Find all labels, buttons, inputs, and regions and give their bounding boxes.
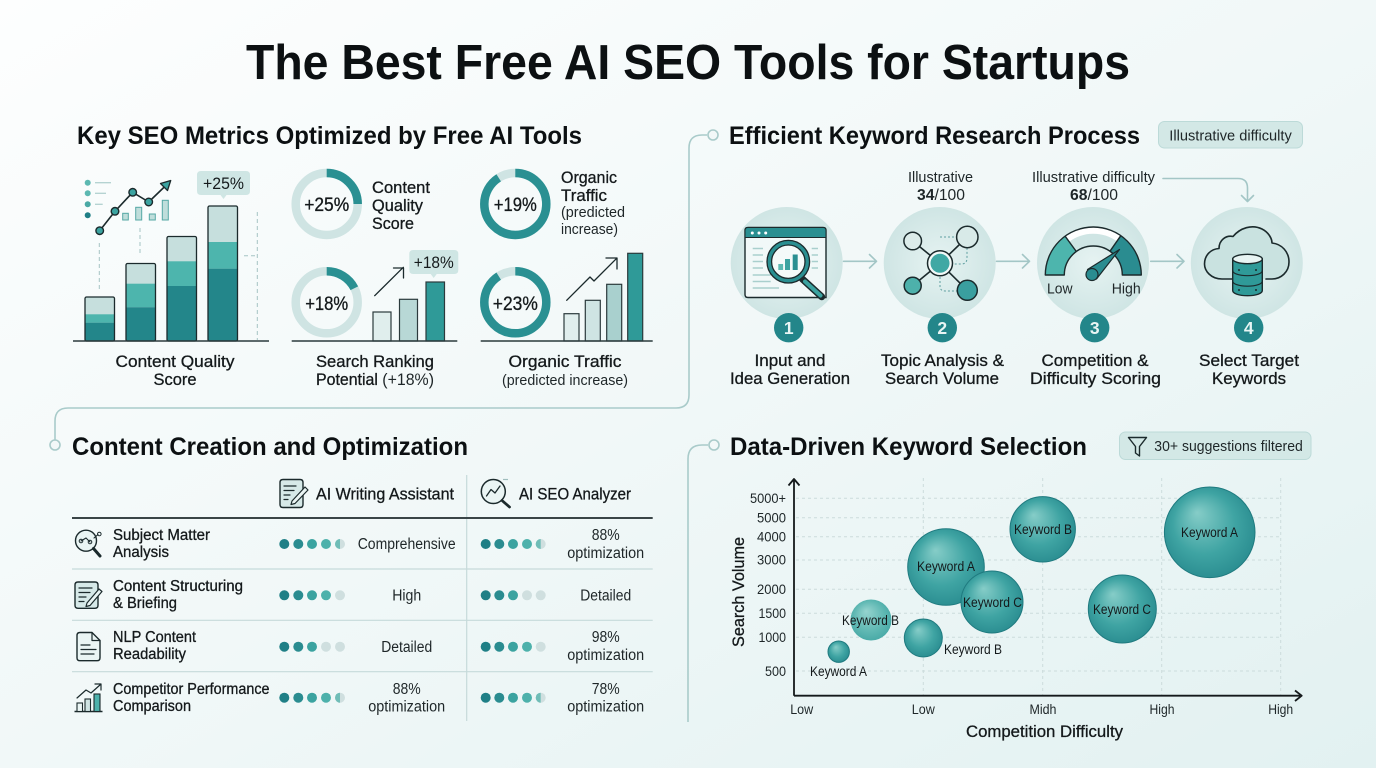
row: content structuring and briefing: & Briefing [113, 595, 177, 612]
donut: +23% organic traffic: +23% [493, 294, 538, 315]
label: organic traffic donut: increase) [561, 221, 618, 238]
badge: number 4: 4 [1244, 318, 1254, 338]
badge: illustrative difficulty: Illustrative difficulty [1169, 128, 1292, 144]
icon: document with pen [75, 582, 102, 608]
axis title: search volume: Search Volume [729, 537, 748, 647]
label: search ranking potential [316, 352, 434, 389]
callout: +18% [409, 250, 458, 278]
heading: data-driven keyword selection: Data-Driven Keyword Selection [730, 433, 1087, 461]
donut: +25% content quality [296, 173, 358, 235]
rating: writing assistant 4.5 of 5 [279, 693, 345, 703]
row: competitor performance comparison [74, 681, 644, 716]
label: organic traffic donut: Organic [561, 168, 617, 187]
label: topic analysis and search volume: Topic Analysis & [881, 351, 1005, 370]
label: topic analysis and search volume [881, 351, 1005, 388]
y-axis tick labels [750, 490, 786, 679]
row: competitor performance comparison: Competitor Performance [113, 681, 270, 698]
bubble labels: Keyword C [1093, 602, 1151, 617]
label: content quality score: Score [154, 370, 196, 389]
y-axis tick labels: 4000 [757, 528, 786, 544]
bubbles [828, 487, 1255, 662]
row: subject matter analysis: Subject Matter [113, 527, 210, 544]
y-axis tick labels: 5000 [757, 510, 786, 526]
panel: keyword research process [729, 122, 1303, 388]
icon: writing document [280, 480, 308, 508]
connector node: keyword research [708, 130, 718, 140]
annotation: illustrative difficulty 68/100: 68/100 [1070, 187, 1118, 204]
label: input and idea generation: Input and [754, 351, 826, 370]
label: organic traffic donut: (predicted [561, 204, 625, 221]
value: comprehensive: Comprehensive [358, 536, 456, 553]
annotation: illustrative difficulty 68/100 [1032, 169, 1155, 204]
step 2: topic analysis and search volume [881, 169, 1005, 388]
step 1: input and idea generation [730, 207, 850, 388]
annotation: illustrative 34/100: 34/100 [917, 187, 965, 204]
y-axis tick labels: 3000 [757, 552, 786, 568]
bubble labels: Keyword A [917, 559, 975, 574]
rating: analyzer 4.5 of 5 [481, 693, 546, 703]
donut: +18% search ranking: +18% [305, 294, 348, 315]
axis title: competition difficulty: Competition Difficulty [966, 722, 1123, 741]
step 4: select target keywords [1191, 207, 1303, 388]
value: 78% optimization [567, 681, 644, 716]
badge: number 1 [774, 313, 803, 342]
callout: +25% [197, 171, 250, 199]
value: high: High [392, 588, 421, 604]
icon: analyzer magnifier [481, 480, 510, 507]
bubble labels: Keyword A [810, 664, 867, 679]
label: search ranking potential: Search Ranking [316, 352, 434, 371]
value: 88% optimization [567, 527, 644, 562]
value: 98% optimization [567, 629, 644, 664]
bubble labels [810, 522, 1238, 679]
arrow: step 2 to 3 [996, 254, 1030, 268]
badge: number 3: 3 [1090, 318, 1100, 338]
row: NLP content readability: Readability [113, 646, 186, 663]
title: The Best Free AI SEO Tools for Startups [246, 36, 1130, 90]
label: organic traffic predicted increase [502, 352, 628, 389]
y-axis tick labels: 2000 [757, 581, 786, 597]
rating: analyzer 4.5 of 5 [481, 539, 546, 549]
x-axis tick labels: Midh [1030, 701, 1056, 717]
column header: AI SEO analyzer: AI SEO Analyzer [519, 484, 631, 504]
column header: AI writing assistant [280, 480, 454, 508]
panel: content creation and optimization [72, 433, 653, 721]
badge: number 3 [1080, 313, 1109, 342]
rating: writing assistant 3 of 5 [279, 642, 345, 652]
x-axis tick labels [790, 701, 1293, 717]
donut: +25% content quality: +25% [304, 195, 349, 216]
bubble labels: Keyword C [963, 595, 1022, 610]
heading: key SEO metrics: Key SEO Metrics Optimized by Free AI Tools [77, 122, 582, 150]
value: 88% optimization: optimization [567, 545, 644, 562]
annotation: illustrative 34/100 [908, 169, 973, 204]
column header: AI writing assistant: AI Writing Assistant [316, 484, 454, 504]
connector: metrics to content [55, 135, 707, 440]
stacked bar chart: content quality score [73, 206, 269, 341]
donut: +19% organic traffic [484, 173, 546, 235]
label: content quality score donut: Quality [372, 196, 423, 215]
y-axis tick labels: 1000 [758, 629, 786, 645]
x-axis tick labels: High [1268, 701, 1293, 717]
heading: keyword research process: Efficient Keyword Research Process [729, 122, 1140, 150]
value: 88% optimization [368, 681, 445, 716]
row: competitor performance comparison: Comparison [113, 698, 191, 715]
label: organic traffic donut: Traffic [561, 186, 607, 205]
rating: analyzer 4 of 5 [481, 642, 546, 652]
rating: writing assistant 4 of 5 [279, 590, 345, 600]
icon: trend line with mini bars [85, 180, 171, 234]
icon: browser with magnifier [745, 228, 826, 298]
label: search ranking potential: Potential (+18%) [316, 370, 434, 389]
label: organic traffic predicted increase: Organic Traffic [508, 352, 622, 371]
icon: difficulty gauge: High [1112, 280, 1141, 297]
icon: difficulty gauge [1045, 227, 1141, 297]
label: content quality score donut: Score [372, 214, 414, 233]
heading: content creation and optimization: Content Creation and Optimization [72, 433, 468, 461]
bubble labels: Keyword B [1014, 522, 1072, 537]
icon: topic network [904, 226, 978, 300]
label: select target keywords [1199, 351, 1299, 388]
bubble labels: Keyword B [944, 642, 1002, 657]
row: NLP content readability: NLP Content [113, 629, 197, 646]
label: select target keywords: Select Target [1199, 351, 1299, 370]
y-axis tick labels: 500 [765, 663, 786, 679]
annotation: illustrative 34/100: Illustrative [908, 169, 973, 186]
bubble labels: Keyword B [842, 613, 899, 628]
badge: number 4 [1234, 313, 1263, 342]
row: content structuring and briefing [75, 578, 631, 612]
step 3: competition and difficulty scoring [1030, 169, 1161, 388]
label: organic traffic donut [561, 168, 625, 238]
value: 98% optimization: 98% [592, 629, 620, 646]
connector node: keyword selection [709, 440, 719, 450]
column header: AI SEO analyzer [481, 480, 631, 507]
badge: 30+ suggestions filtered: 30+ suggestions filtered [1154, 438, 1303, 455]
y-axis tick labels: 5000+ [750, 490, 786, 506]
value: 78% optimization: optimization [567, 698, 644, 716]
y-axis tick labels: 1500 [758, 605, 786, 621]
label: input and idea generation [730, 351, 850, 388]
label: content quality score [116, 352, 235, 389]
rating: analyzer 3 of 5 [481, 590, 546, 600]
label: competition and difficulty scoring: Difficulty Scoring [1030, 369, 1161, 388]
label: content quality score donut [372, 178, 430, 233]
arrow: step 3 to 4 [1151, 254, 1184, 268]
arrow: difficulty annotation to step 4 [1163, 178, 1254, 202]
badge: number 2 [928, 313, 957, 342]
icon: document [77, 632, 100, 661]
badge: illustrative difficulty [1158, 122, 1302, 148]
donut: +18% search ranking [296, 271, 358, 333]
value: 98% optimization: optimization [567, 647, 644, 664]
value: 88% optimization: 88% [393, 681, 421, 698]
donut: +19% organic traffic: +19% [494, 195, 537, 216]
row: content structuring and briefing: Content Structuring [113, 578, 243, 595]
connector: keyword selection [688, 445, 708, 722]
callout: +25%: +25% [203, 174, 244, 193]
value: detailed: Detailed [580, 588, 631, 604]
badge: number 1: 1 [784, 318, 794, 338]
panel: key SEO metrics [73, 122, 653, 389]
connector node: content creation [50, 440, 60, 450]
icon: difficulty gauge: Low [1047, 280, 1073, 297]
label: content quality score: Content Quality [116, 352, 235, 371]
bar chart: search ranking potential [292, 267, 457, 341]
donut: +23% organic traffic [484, 271, 546, 333]
value: detailed: Detailed [381, 639, 432, 656]
value: 88% optimization: 88% [592, 527, 620, 544]
row: NLP content readability [77, 629, 644, 664]
x-axis tick labels: Low [790, 701, 814, 717]
label: competition and difficulty scoring: Competition & [1042, 351, 1149, 370]
rating: writing assistant 4.5 of 5 [279, 539, 345, 549]
badge: 30+ suggestions filtered [1120, 432, 1311, 460]
value: 88% optimization: optimization [368, 698, 445, 716]
label: select target keywords: Keywords [1212, 369, 1286, 388]
panel: data-driven keyword selection [729, 432, 1311, 741]
icon: cloud with database [1204, 227, 1289, 296]
icon: bars with trend arrow [74, 684, 102, 712]
icon: magnifier with nodes [76, 530, 101, 556]
arrow: step 1 to 2 [844, 254, 876, 268]
label: content quality score donut: Content [372, 178, 430, 197]
label: organic traffic predicted increase: (predicted increase) [502, 372, 628, 389]
x-axis tick labels: Low [912, 701, 936, 717]
label: topic analysis and search volume: Search Volume [885, 369, 999, 388]
badge: number 2: 2 [937, 318, 947, 338]
label: input and idea generation: Idea Generation [730, 369, 850, 388]
value: 78% optimization: 78% [592, 681, 620, 698]
axes [788, 479, 1302, 701]
x-axis tick labels: High [1150, 701, 1174, 717]
bar chart: organic traffic [481, 253, 653, 341]
bubble chart: search volume vs competition difficulty [729, 478, 1302, 741]
row: subject matter analysis [76, 527, 644, 562]
label: competition and difficulty scoring [1030, 351, 1161, 388]
bubble labels: Keyword A [1181, 525, 1238, 540]
callout: +18%: +18% [414, 253, 454, 272]
annotation: illustrative difficulty 68/100: Illustrative difficulty [1032, 169, 1155, 186]
row: subject matter analysis: Analysis [113, 544, 169, 561]
